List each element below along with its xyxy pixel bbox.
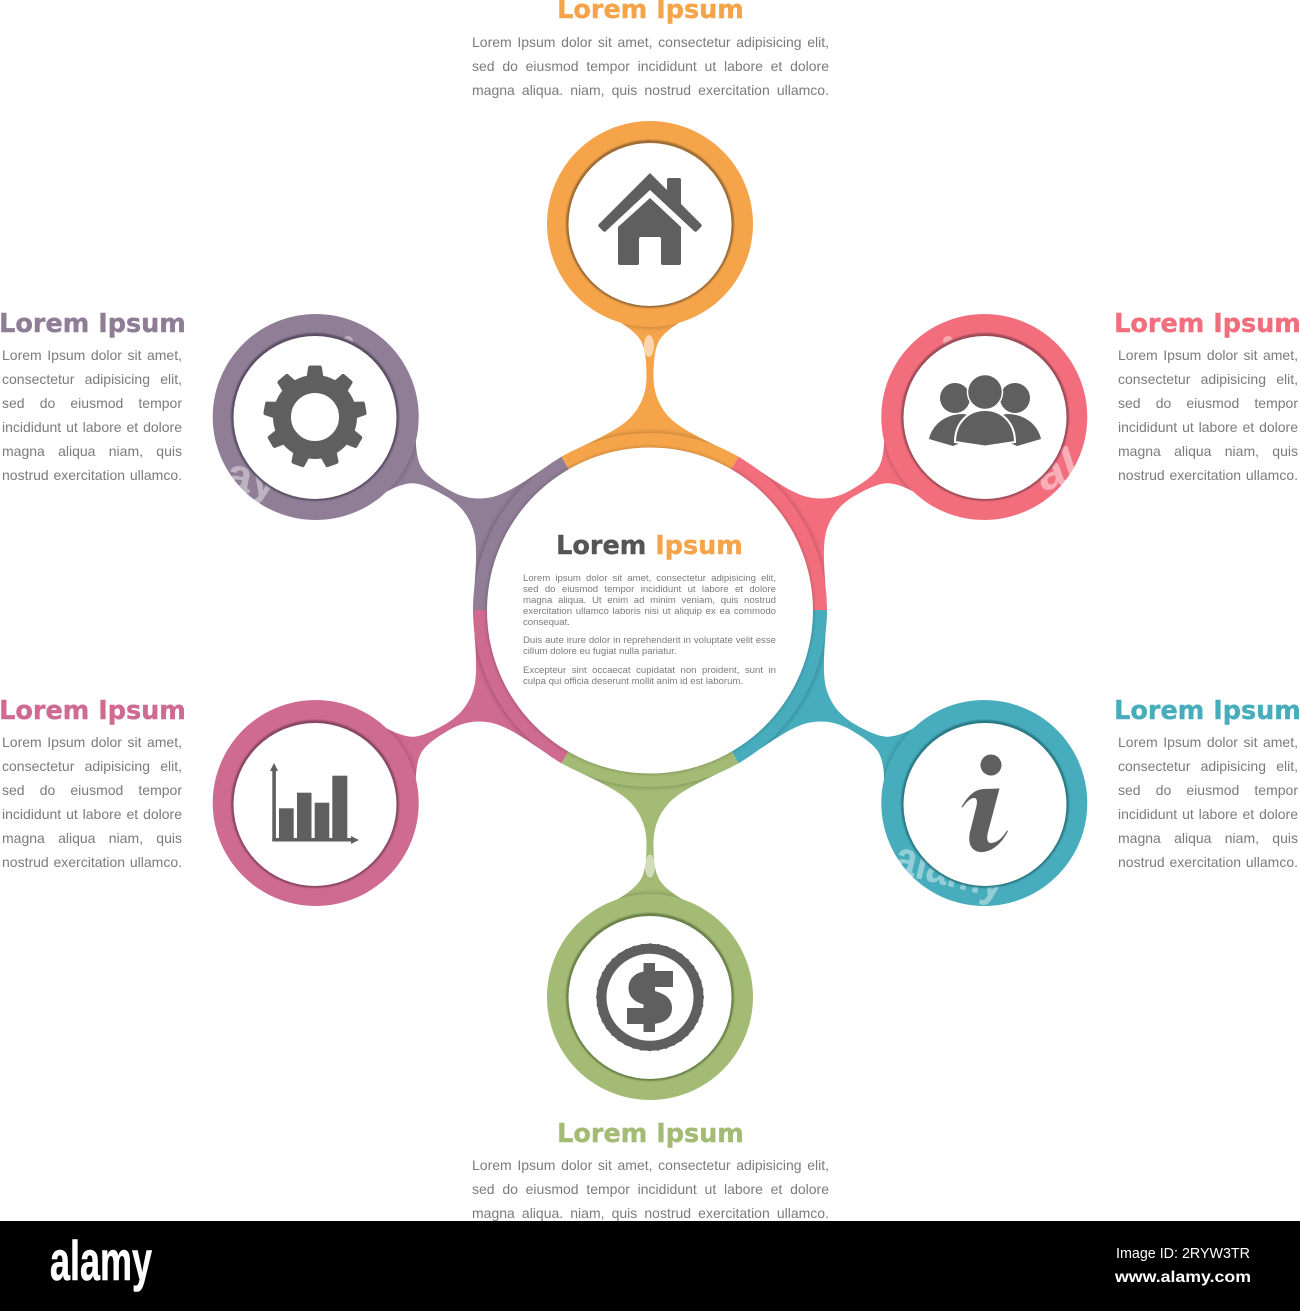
website: www.alamy.com	[1114, 1269, 1251, 1286]
paragraph 1: Lorem ipsum dolor sit amet, consectetur adipisicing elit,	[523, 573, 776, 584]
body: top: Lorem Ipsum dolor sit amet, consectetur adipisicing elit,	[472, 34, 829, 50]
icon: dollar coin	[598, 945, 702, 1049]
body: lower left: sed do eiusmod tempor	[2, 782, 182, 798]
node: lower right teal: alamy	[889, 831, 1011, 910]
center disc	[486, 446, 814, 774]
heading: lower right: Lorem Ipsum	[1114, 696, 1300, 726]
text block: bottom	[472, 1119, 829, 1221]
node: bottom green	[547, 752, 753, 1100]
body: lower left: Lorem Ipsum dolor sit amet,	[2, 734, 182, 750]
body: lower right	[1118, 734, 1298, 870]
heading: upper right: Lorem Ipsum	[1114, 309, 1300, 339]
paragraph 1: sed do eiusmod tempor incididunt ut labore et dolore	[523, 584, 776, 595]
body: lower left: incididunt ut labore et dolore	[2, 806, 182, 822]
node: upper left purple: ay	[222, 447, 283, 509]
body: upper right: nostrud exercitation ullamco.	[1118, 467, 1298, 483]
body: upper right: sed do eiusmod tempor	[1118, 395, 1298, 411]
body: upper left	[2, 347, 182, 483]
body: bottom: Lorem Ipsum dolor sit amet, consectetur adipisicing elit,	[472, 1157, 829, 1173]
paragraph 2	[523, 635, 776, 657]
node: upper right red	[731, 314, 1088, 610]
paragraph 1: magna aliqua. Ut enim ad minim veniam, quis nostrud	[523, 595, 776, 606]
node: upper left purple	[212, 314, 569, 610]
paragraph 3: culpa qui officia deserunt mollit anim id est laborum.	[523, 676, 743, 687]
text block: upper left	[0, 309, 186, 483]
heading: lower left: Lorem Ipsum	[0, 696, 186, 726]
body: bottom	[472, 1157, 829, 1221]
body: upper left: magna aliqua niam, quis	[2, 443, 182, 459]
text block: lower left	[0, 696, 186, 870]
heading: center: Lorem Ipsum	[556, 531, 743, 561]
body: upper right: incididunt ut labore et dolore	[1118, 419, 1298, 435]
body: upper right: magna aliqua niam, quis	[1118, 443, 1298, 459]
icon: info	[962, 754, 1008, 852]
body: lower left: magna aliqua niam, quis	[2, 830, 182, 846]
text block: upper right	[1114, 309, 1300, 483]
icon: house	[598, 173, 702, 265]
body: upper right: consectetur adipisicing elit,	[1118, 371, 1298, 387]
node: lower right teal	[732, 610, 1088, 906]
body: upper left: consectetur adipisicing elit,	[2, 371, 182, 387]
paragraph 1: consequat.	[523, 617, 570, 628]
paragraph 2: Duis aute irure dolor in reprehenderit in voluptate velit esse	[523, 635, 776, 646]
body: upper left: nostrud exercitation ullamco.	[2, 467, 182, 483]
body: lower right: consectetur adipisicing elit,	[1118, 758, 1298, 774]
body: lower right: sed do eiusmod tempor	[1118, 782, 1298, 798]
body: upper right	[1118, 347, 1298, 483]
node: top orange	[547, 121, 753, 470]
text block: center	[523, 531, 776, 687]
body: top: sed do eiusmod tempor incididunt ut labore et dolore	[472, 58, 829, 74]
body: lower left: consectetur adipisicing elit,	[2, 758, 182, 774]
body: upper left: sed do eiusmod tempor	[2, 395, 182, 411]
body: top: magna aliqua. niam, quis nostrud exercitation ullamco.	[472, 82, 829, 98]
icon: bar chart	[270, 763, 359, 844]
icon: gear	[263, 366, 367, 468]
node: upper right red: al	[1028, 436, 1085, 502]
footer bar	[0, 1221, 1300, 1311]
heading: bottom: Lorem Ipsum	[557, 1119, 744, 1149]
text block: top	[472, 0, 829, 98]
body: upper left: incididunt ut labore et dolore	[2, 419, 182, 435]
body: lower right: incididunt ut labore et dolore	[1118, 806, 1298, 822]
node: lower left pink	[212, 610, 568, 906]
body: lower left	[2, 734, 182, 870]
paragraph 2: cillum dolore eu fugiat nulla pariatur.	[523, 646, 677, 657]
body: upper right: Lorem Ipsum dolor sit amet,	[1118, 347, 1298, 363]
paragraph 1	[523, 573, 776, 628]
body: bottom: sed do eiusmod tempor incididunt ut labore et dolore	[472, 1181, 829, 1197]
circle diagram	[212, 121, 1088, 1100]
body: lower left: nostrud exercitation ullamco.	[2, 854, 182, 870]
body: upper left: Lorem Ipsum dolor sit amet,	[2, 347, 182, 363]
body: lower right: nostrud exercitation ullamco.	[1118, 854, 1298, 870]
paragraph 3: Excepteur sint occaecat cupidatat non proident, sunt in	[523, 665, 776, 676]
image id: Image ID: 2RYW3TR	[1116, 1246, 1250, 1262]
footer logo: alamy	[50, 1229, 152, 1292]
body: lower right: Lorem Ipsum dolor sit amet,	[1118, 734, 1298, 750]
body: top	[472, 34, 829, 98]
body: lower right: magna aliqua niam, quis	[1118, 830, 1298, 846]
paragraph 3	[523, 665, 776, 687]
paragraph 1: exercitation ullamco laboris nisi ut aliquip ex ea commodo	[523, 606, 776, 617]
heading: upper left: Lorem Ipsum	[0, 309, 186, 339]
body: bottom: magna aliqua. niam, quis nostrud exercitation ullamco.	[472, 1205, 829, 1221]
text block: lower right	[1114, 696, 1300, 870]
icon: people	[929, 374, 1041, 446]
